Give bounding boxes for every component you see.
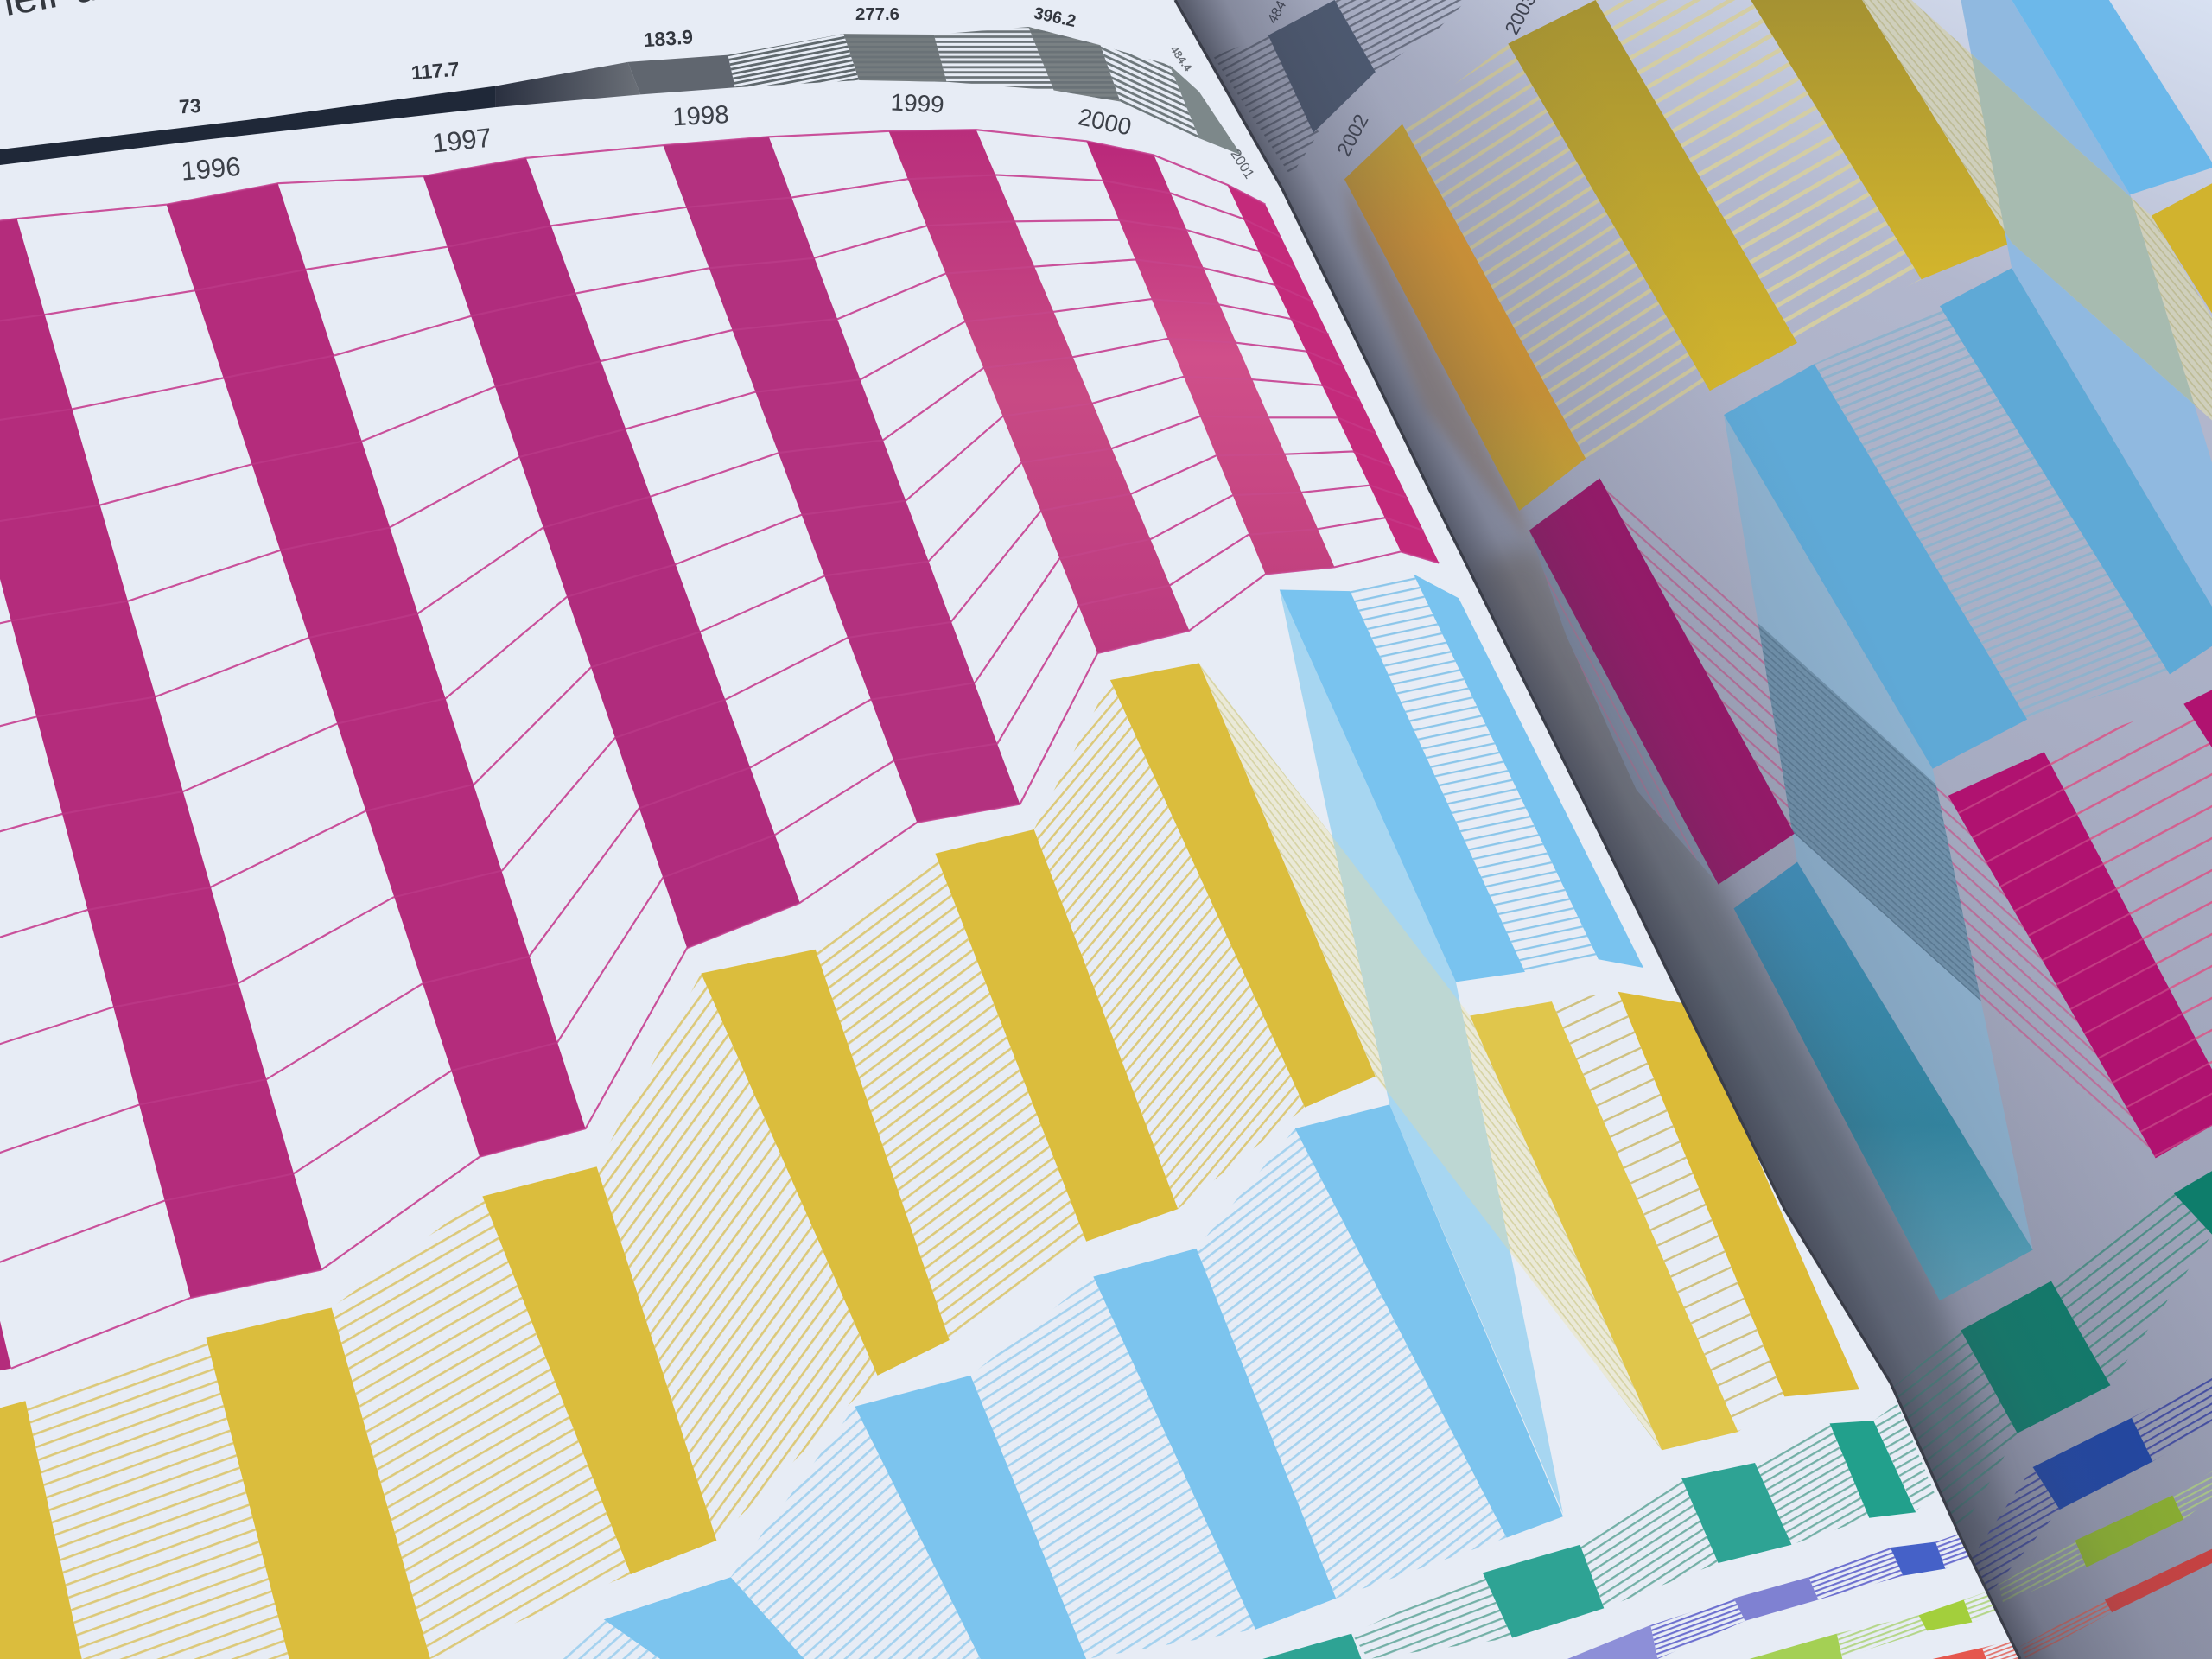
blue stream (557, 1104, 1563, 1659)
year labels: 1996 (180, 151, 242, 187)
right page dark ribbon block (1213, 0, 1467, 176)
right page year labels (1265, 0, 1541, 160)
values above ribbon: 117.7 (410, 57, 461, 84)
year labels: 2000 (1076, 103, 1134, 140)
teal stream (1262, 1403, 1936, 1659)
green stream (1749, 1592, 1996, 1659)
yellow stream (0, 663, 1376, 1659)
gutter shadow (1175, 0, 2212, 1659)
year labels: 1999 (890, 88, 944, 118)
values above ribbon (178, 3, 1195, 118)
right page red stream (2020, 1549, 2212, 1659)
purple stream (1567, 1530, 1975, 1659)
values above ribbon: 396.2 (1033, 3, 1077, 31)
right page year labels: 2002 (1332, 111, 1373, 160)
values above ribbon: 183.9 (643, 25, 694, 51)
year labels: 2001 (1227, 147, 1257, 181)
year labels (180, 88, 1257, 187)
gutter tint strip (1474, 543, 2018, 1552)
lower yellow bars near gutter (1470, 992, 1859, 1450)
right page background (1175, 0, 2212, 1659)
gutter edge (1175, 0, 2020, 1659)
top dark ribbon chart (0, 27, 1242, 165)
upper blue bars near gutter (1199, 574, 1662, 1514)
red stream (1933, 1642, 2018, 1659)
right page magenta stream (1529, 478, 2212, 1158)
right page yellow stream (1344, 0, 2212, 543)
right page blue stream lower (1968, 1376, 2212, 1594)
values above ribbon: 277.6 (855, 5, 899, 24)
values above ribbon: 484.4 (1167, 43, 1195, 74)
year labels: 1997 (430, 123, 493, 159)
right page teal stream (1891, 1171, 2212, 1535)
right page green stream (1999, 1471, 2212, 1604)
right page blue stream and wedges (1599, 0, 2212, 1300)
year labels: 1998 (671, 100, 729, 131)
values above ribbon: 73 (178, 94, 201, 118)
magenta stream (0, 130, 1439, 1396)
